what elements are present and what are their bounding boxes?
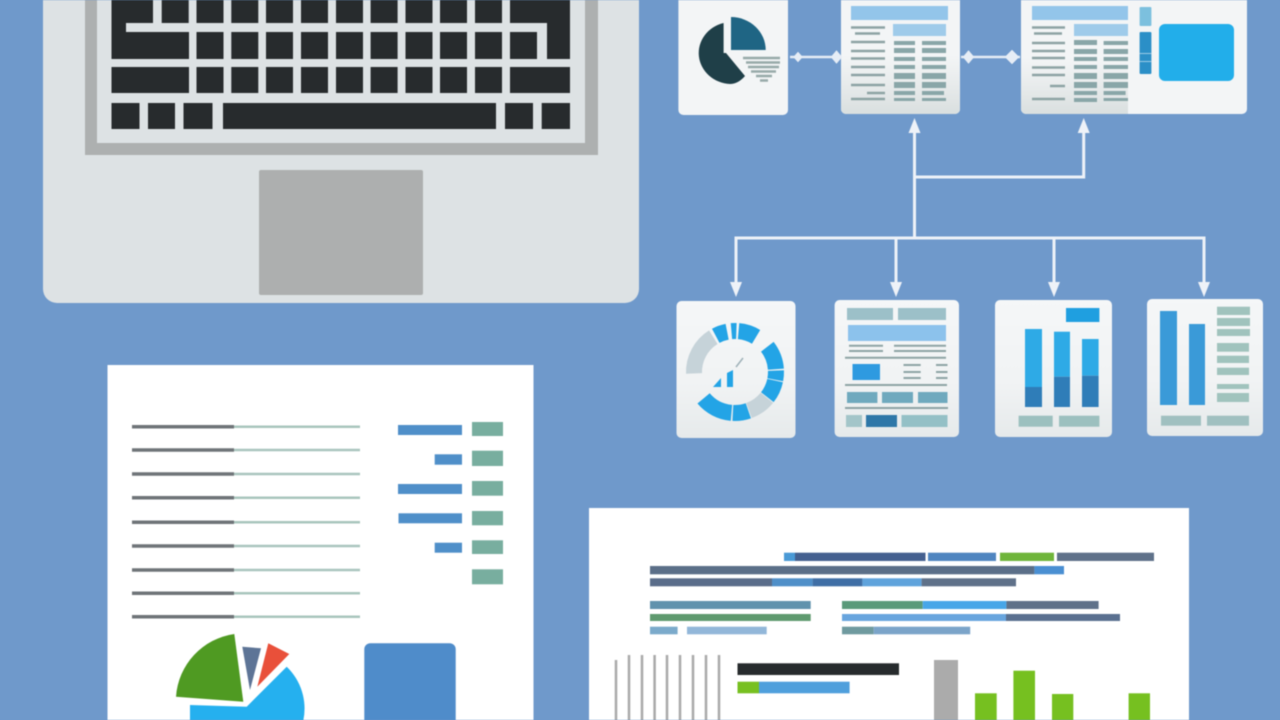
panel: right report sheet [589,508,1189,720]
horizontal bars [738,663,899,693]
arrow: table to summary report [961,50,1020,64]
text lines [845,346,948,408]
top cells [847,308,946,320]
text row 1 [784,553,1154,561]
text row 5 [650,614,1120,621]
text row 2 [650,566,1064,574]
table headers [1032,6,1128,20]
left text lines [851,28,885,99]
panel: donut gauge card [676,301,796,438]
bars [1160,311,1205,405]
column chart [934,660,1150,720]
bars [1025,329,1099,407]
gauge needle [713,358,743,387]
small lines [904,365,948,378]
legend tile [1066,308,1099,322]
arrow: connector up to table and report [908,118,1090,238]
panel: report with summary card [1021,0,1247,114]
vertical line chart [616,655,719,720]
bottom cells [846,415,948,427]
text lines [132,427,360,617]
blue summary box [1159,24,1234,81]
pie chart [176,634,305,720]
trackpad [259,170,423,295]
vertical indicator [1140,7,1151,74]
blue value bars [398,425,462,553]
laptop [43,0,639,303]
panel: report table card [841,0,960,114]
keyboard frame [85,0,598,155]
blue tile [852,364,880,380]
left text lines [1032,28,1065,99]
axis labels [1019,416,1099,427]
panel: left report sheet [108,365,534,720]
panel: mixed layout card [835,300,959,437]
panel: bar chart card [995,300,1112,437]
text row 3 [650,578,1016,586]
text row 6 [650,627,970,634]
axis labels [1161,416,1249,426]
arrow: distribution connector to four cards [730,238,1210,297]
middle cells [847,392,948,403]
green value tiles [472,422,503,584]
table columns [894,41,946,101]
table columns [1074,40,1128,102]
list rows [1217,307,1250,402]
blue block [364,643,456,720]
table headers [851,6,948,20]
arrow: pie card to table [790,50,842,64]
laptop body [43,0,639,303]
panel: pie chart card [678,0,788,115]
header bar [848,325,946,341]
donut gauge [677,314,793,430]
panel: bars and list card [1147,299,1263,436]
text row 4 [650,601,1099,609]
pie chart [699,17,780,84]
keyboard keys [112,0,570,129]
